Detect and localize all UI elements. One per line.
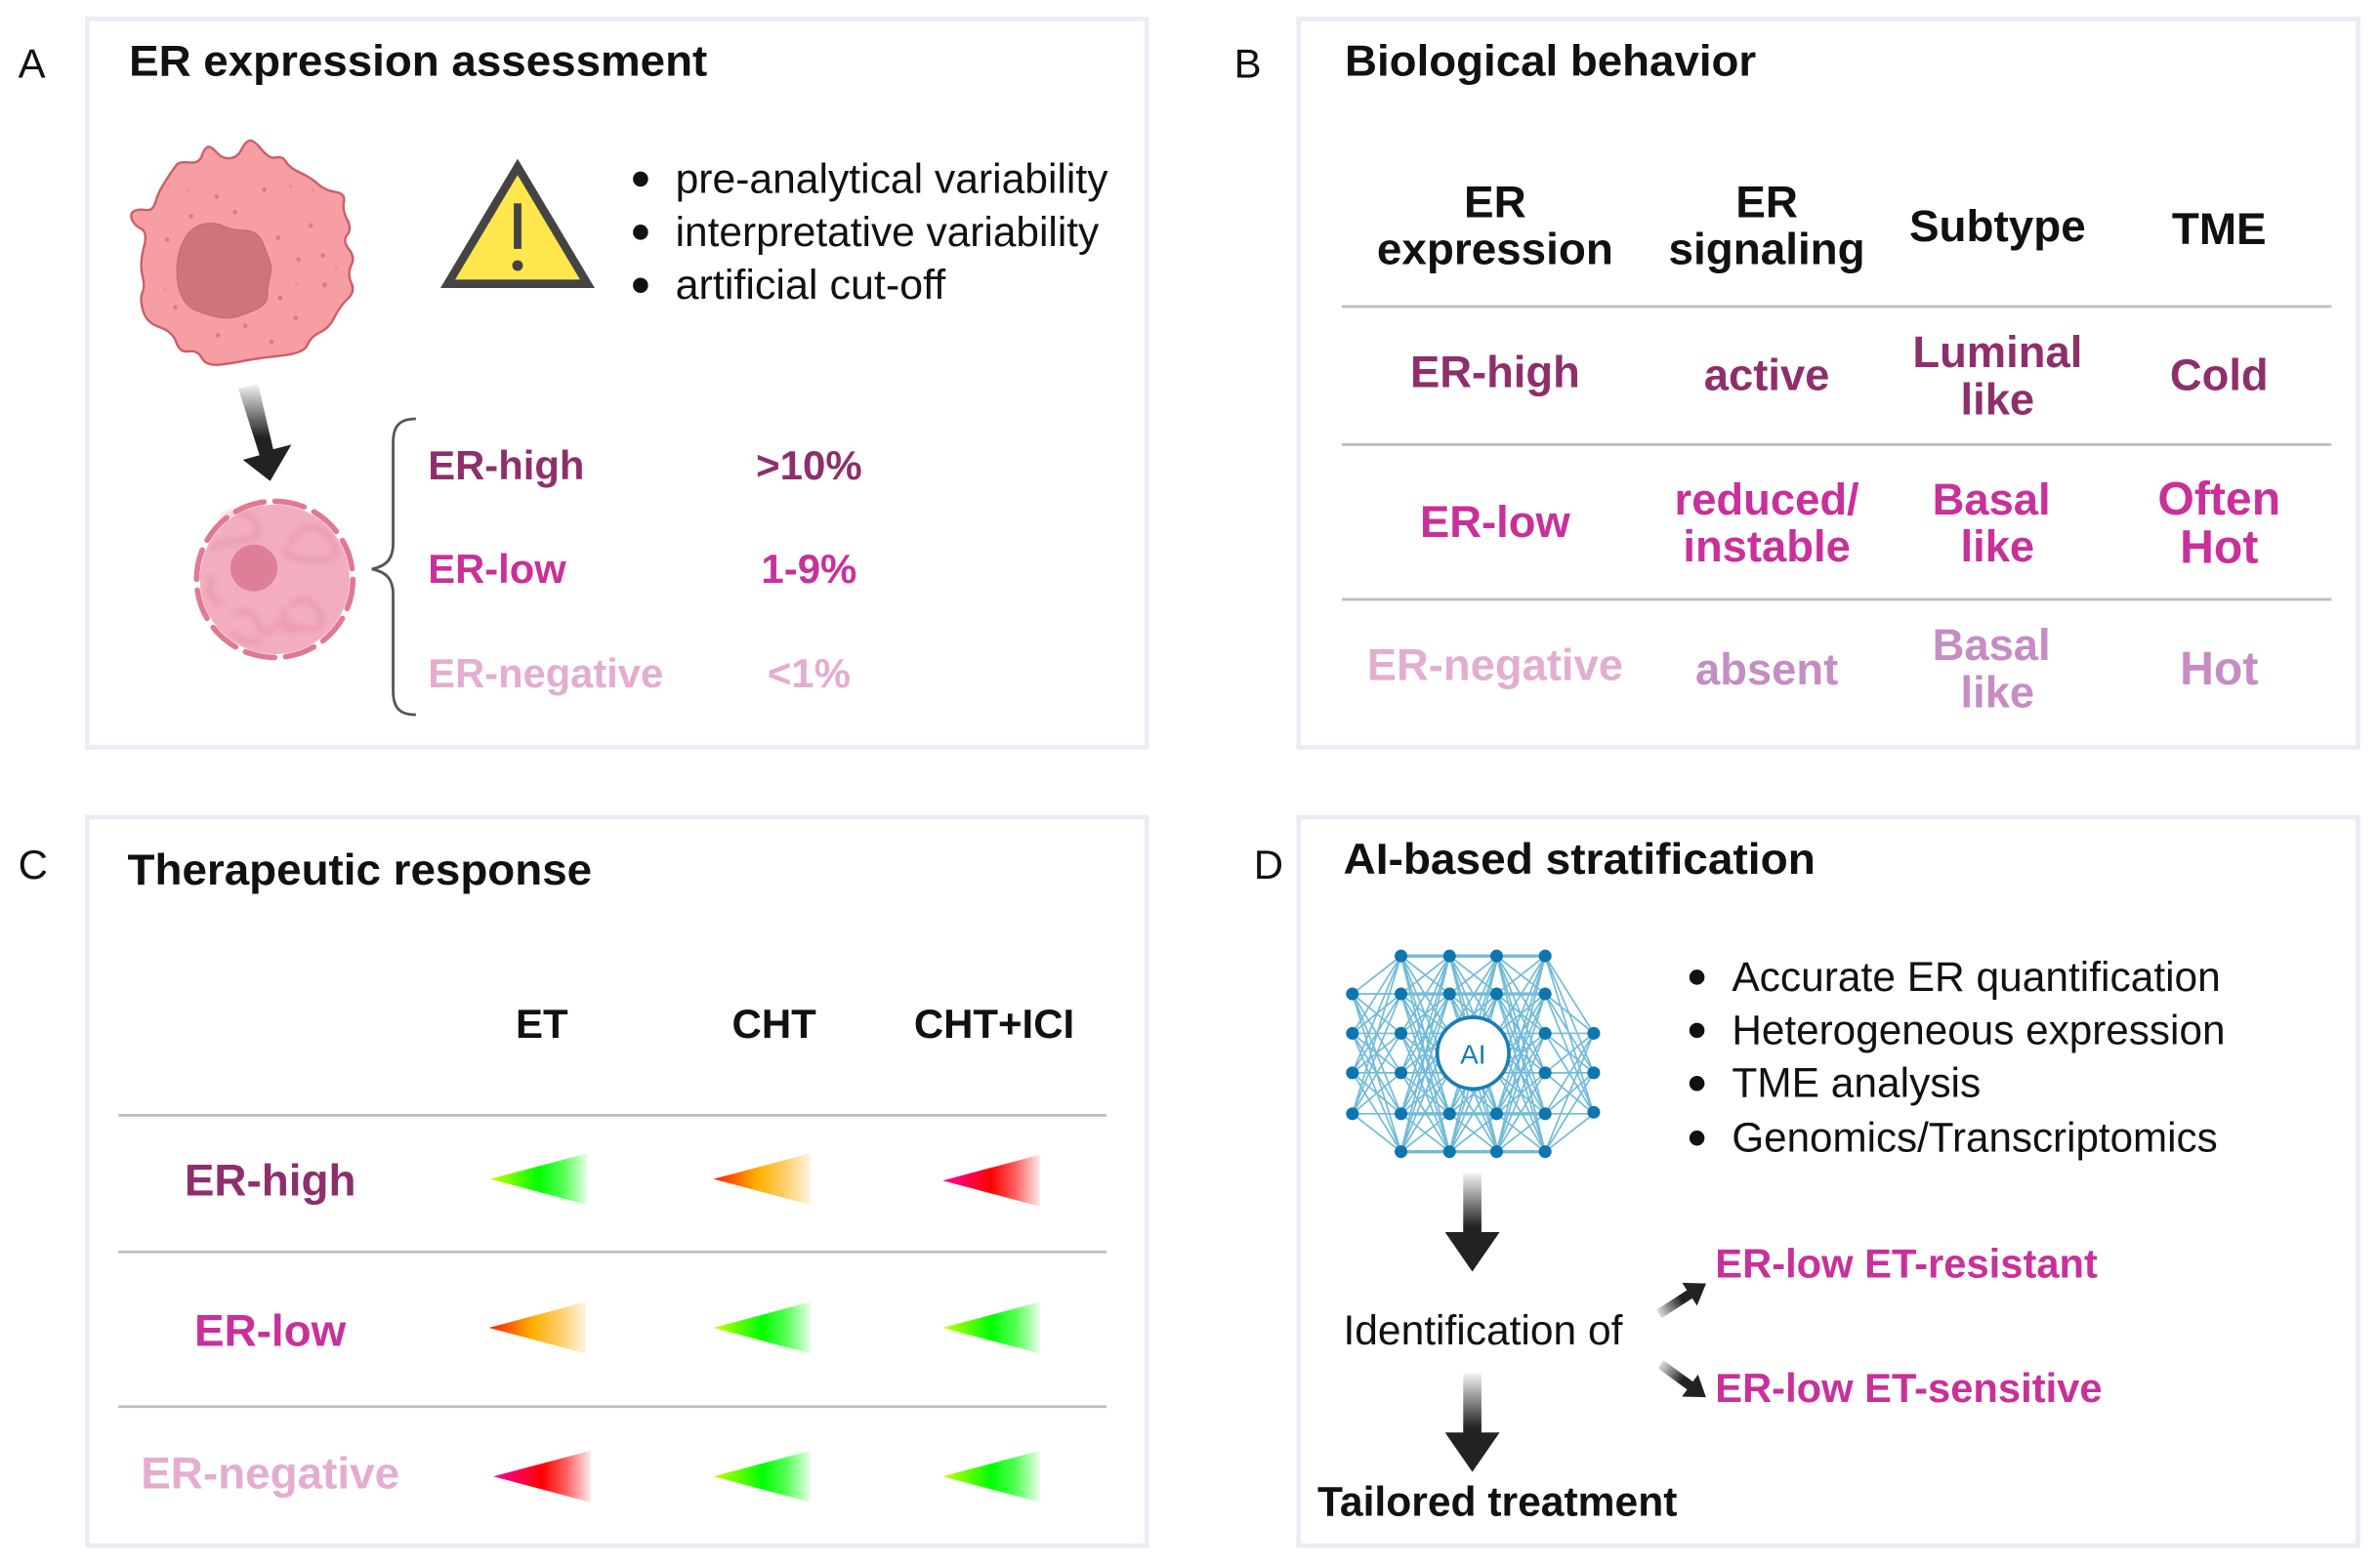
arrow: network to identification bbox=[1445, 1173, 1500, 1271]
ER category thresholds: ER-high bbox=[428, 442, 584, 488]
row labels bbox=[141, 1156, 399, 1499]
table header bbox=[1377, 177, 2267, 273]
icon: AI neural network: AI bbox=[1460, 1040, 1486, 1070]
row labels: ER-negative bbox=[141, 1449, 399, 1499]
row: ER-negative: Basal bbox=[1933, 620, 2051, 670]
row labels: ER-low bbox=[194, 1306, 347, 1356]
row: ER-negative: absent bbox=[1695, 644, 1838, 694]
row: ER-high: active bbox=[1704, 350, 1829, 399]
row: ER-low: Hot bbox=[2180, 521, 2258, 574]
heading C: Therapeutic response bbox=[128, 846, 592, 894]
heading D: AI-based stratification bbox=[1343, 836, 1816, 884]
bullet list: variability bbox=[641, 155, 1108, 309]
heading A: ER expression assessment bbox=[129, 38, 708, 86]
panel C: Therapeutic response bbox=[19, 817, 1147, 1545]
row: ER-low bbox=[1420, 473, 2280, 574]
panel letter B: B bbox=[1234, 40, 1262, 86]
bullet list: AI capabilities: Genomics/Transcriptomics bbox=[1732, 1115, 2218, 1162]
ER category thresholds: >10% bbox=[756, 442, 862, 488]
row: ER-high: ER-high bbox=[1410, 347, 1580, 396]
row: ER-negative: like bbox=[1960, 667, 2034, 717]
row: ER-low: Basal bbox=[1933, 474, 2051, 524]
icon: stained cell bbox=[196, 501, 353, 657]
row: ER-high: Cold bbox=[2170, 350, 2269, 399]
panel letter D: D bbox=[1254, 842, 1283, 887]
bullet list: variability: interpretative variability bbox=[676, 209, 1100, 256]
response triangles: ER-negative bbox=[493, 1451, 1040, 1503]
row: ER-low: reduced/ bbox=[1675, 474, 1859, 524]
table header: Subtype bbox=[1909, 201, 2086, 251]
table header: signaling bbox=[1669, 224, 1865, 273]
panel letter A: A bbox=[19, 40, 46, 86]
row: ER-high: like bbox=[1960, 374, 2034, 424]
ER category thresholds: ER-low bbox=[428, 546, 566, 592]
row: ER-negative: ER-negative bbox=[1367, 639, 1623, 689]
ER category thresholds: 1-9% bbox=[761, 546, 856, 592]
bullet list: variability: pre-analytical variability bbox=[676, 155, 1108, 202]
label: ER-low ET-sensitive: ER-low ET-sensitive bbox=[1715, 1365, 2103, 1411]
arrow: identification to tailored treatment bbox=[1445, 1374, 1500, 1472]
row: ER-negative: Hot bbox=[2180, 642, 2258, 695]
icon: AI neural network bbox=[1353, 956, 1594, 1152]
therapy column headers: CHT bbox=[732, 1001, 816, 1047]
panel D: AI-based stratification bbox=[1254, 817, 2358, 1545]
therapy column headers bbox=[516, 1001, 1074, 1047]
row: ER-high: Luminal bbox=[1912, 327, 2082, 377]
table header: TME bbox=[2172, 204, 2267, 254]
arrow: to ET-resistant bbox=[1651, 1272, 1714, 1326]
label: ER-low ET-resistant: ER-low ET-resistant bbox=[1715, 1241, 2098, 1287]
panel B: Biological behavior bbox=[1234, 19, 2358, 747]
therapy column headers: ET bbox=[516, 1001, 568, 1047]
row labels: ER-high bbox=[185, 1156, 355, 1206]
row: ER-low: instable bbox=[1683, 521, 1851, 571]
ER category thresholds bbox=[428, 442, 862, 696]
bullet list: AI capabilities bbox=[1697, 954, 2225, 1162]
response triangles: ER-low bbox=[488, 1302, 1040, 1353]
icon: warning triangle bbox=[447, 167, 587, 284]
icon: tumor cell bbox=[131, 141, 353, 365]
bullet list: variability: artificial cut-off bbox=[676, 262, 945, 309]
panel letter C: C bbox=[19, 842, 48, 887]
row: ER-low: ER-low bbox=[1420, 497, 1570, 547]
row: ER-low: Often bbox=[2157, 473, 2280, 525]
text: tailored treatment: Tailored treatment bbox=[1317, 1479, 1677, 1526]
bullet list: AI capabilities: Heterogeneous expression bbox=[1732, 1007, 2225, 1053]
table header: ER bbox=[1735, 177, 1798, 227]
bullet list: AI capabilities: Accurate ER quantification bbox=[1732, 954, 2221, 1001]
table header: expression bbox=[1377, 224, 1613, 273]
text: identification of: Identification of bbox=[1343, 1307, 1623, 1354]
heading B: Biological behavior bbox=[1345, 38, 1756, 86]
row: ER-negative bbox=[1367, 620, 2258, 717]
therapy column headers: CHT+ICI bbox=[914, 1001, 1074, 1047]
ER category thresholds: <1% bbox=[768, 650, 851, 696]
arrow: cell to pathology bbox=[238, 384, 291, 481]
response triangles: ER-high bbox=[490, 1153, 1040, 1207]
row: ER-low: like bbox=[1960, 521, 2034, 571]
bracket bbox=[372, 419, 416, 715]
bullet list: AI capabilities: TME analysis bbox=[1732, 1060, 1981, 1107]
ER category thresholds: ER-negative bbox=[428, 650, 663, 696]
panel A: ER expression assessment bbox=[19, 19, 1147, 747]
row: ER-high bbox=[1410, 327, 2269, 424]
table header: ER bbox=[1464, 177, 1526, 227]
arrow: to ET-sensitive bbox=[1652, 1353, 1714, 1408]
